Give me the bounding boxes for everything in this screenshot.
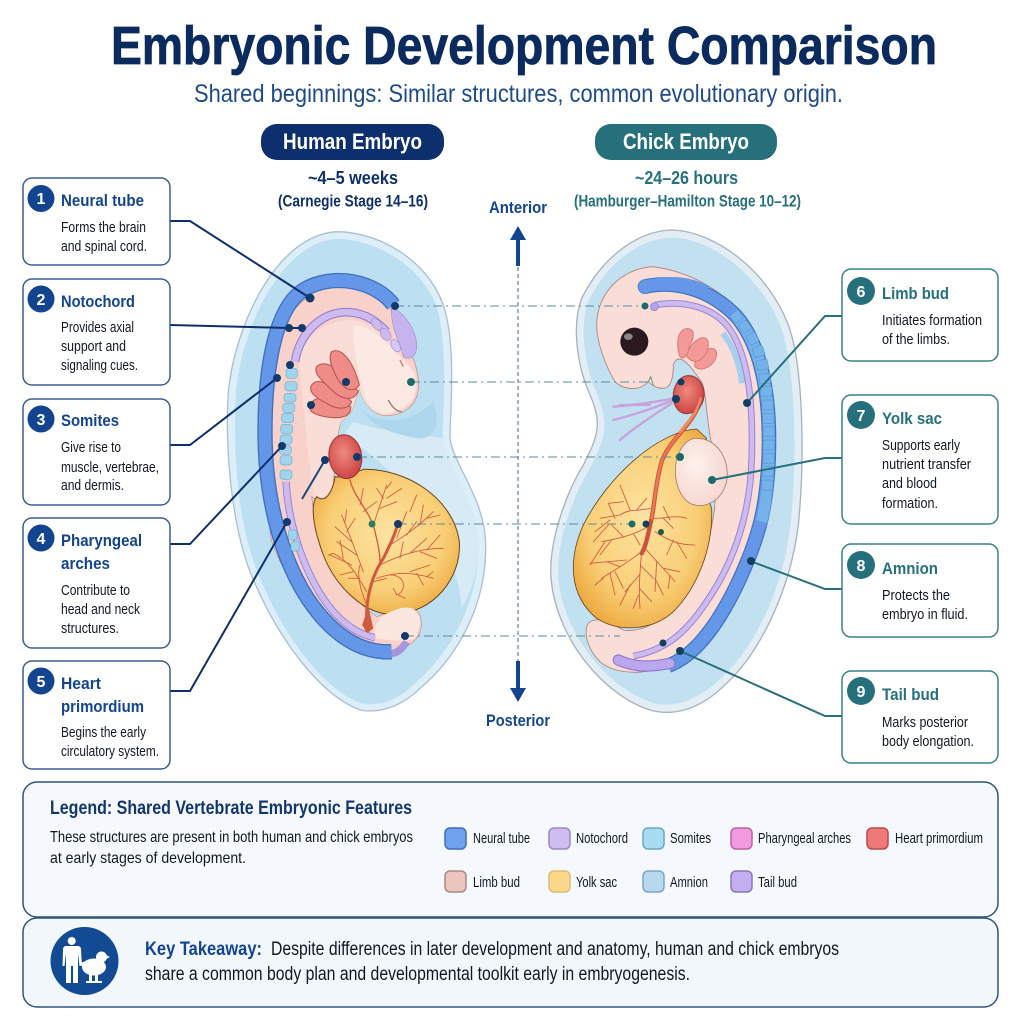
comparison dashed guide lines: [358, 306, 680, 636]
callout 6: limb bud: [842, 269, 998, 361]
callout 9: tail bud: [842, 671, 998, 763]
callout 9: tail bud: Marks posterior: [882, 715, 968, 731]
callout 4: pharyngeal arches: head and neck: [61, 602, 141, 618]
legend labels: Somites: [670, 831, 711, 847]
legend labels: Limb bud: [473, 875, 520, 891]
callout 7: yolk sac: 7: [857, 408, 866, 425]
callout 7: yolk sac: Supports early: [882, 438, 961, 454]
callout 7: yolk sac: and blood: [882, 476, 937, 492]
callout 9: tail bud: body elongation.: [882, 734, 974, 750]
legend labels: Yolk sac: [576, 875, 617, 891]
callout 4: pharyngeal arches: Contribute to: [61, 583, 130, 599]
takeaway text: [145, 939, 839, 985]
takeaway text: Key Takeaway:: [145, 939, 262, 960]
callout 4: pharyngeal arches: [23, 518, 170, 648]
callout 4: pharyngeal arches: 4: [37, 531, 46, 548]
callout 4: pharyngeal arches: Pharyngeal: [61, 531, 142, 550]
callout 3: somites: [23, 399, 170, 505]
callout 1: neural tube: Neural tube: [61, 191, 144, 210]
callout 9: tail bud: 9: [857, 684, 866, 701]
anterior-posterior axis: Posterior: [486, 711, 550, 730]
chick heart outflow: [680, 398, 701, 432]
callout 7: yolk sac: [842, 395, 998, 524]
chick embryo heading: [595, 124, 777, 160]
callout 6: limb bud: Initiates formation: [882, 313, 982, 329]
chick marker dots: [628, 302, 755, 655]
callout 1: neural tube: Forms the brain: [61, 220, 146, 236]
callout 2: notochord: Provides axial: [61, 320, 134, 336]
human embryo illustration: [227, 232, 486, 711]
human yolk sac: [313, 469, 459, 614]
human purple head blob: [392, 308, 417, 358]
chick eye: [620, 328, 648, 356]
anterior-posterior axis: [486, 198, 550, 730]
human tail cover: [375, 608, 420, 641]
chick limb swelling: [675, 438, 727, 506]
chick tail bud end: [618, 660, 670, 666]
takeaway text: share a common body plan and developmental toolkit early in embryogenesis.: [145, 964, 690, 985]
subtitle: Shared beginnings: Similar structures, common evolutionary origin.: [194, 80, 843, 108]
chick stage: [574, 168, 801, 210]
callout 6: limb bud: of the limbs.: [882, 332, 950, 348]
callout 5: heart primordium: [23, 661, 170, 769]
callout 3: somites: and dermis.: [61, 478, 124, 494]
callout 1: neural tube: 1: [37, 191, 46, 208]
callout 2: notochord: signaling cues.: [61, 358, 138, 374]
human neural tube: [265, 281, 393, 652]
chick body: [586, 267, 764, 672]
callout 6: limb bud: 6: [857, 284, 866, 301]
chick yolk sac: [573, 429, 712, 628]
chick leader lines: [680, 316, 842, 716]
chick allantois: [613, 398, 675, 440]
callout 8: amnion: Amnion: [882, 559, 938, 578]
callout 9: tail bud: Tail bud: [882, 685, 939, 704]
callout 8: amnion: 8: [857, 558, 866, 575]
callout 2: notochord: Notochord: [61, 292, 135, 311]
callout 7: yolk sac: formation.: [882, 496, 938, 512]
chick stage: (Hamburger–Hamilton Stage 10–12): [574, 192, 801, 210]
callout 5: heart primordium: primordium: [61, 697, 144, 716]
callout 3: somites: muscle, vertebrae,: [61, 460, 159, 476]
legend labels: Tail bud: [758, 875, 797, 891]
callout 3: somites: 3: [37, 412, 46, 429]
human somites: [279, 368, 300, 551]
legend labels: Heart primordium: [895, 831, 983, 847]
callout 7: yolk sac: Yolk sac: [882, 409, 942, 428]
chick notochord: [633, 303, 752, 656]
key takeaway panel: [23, 918, 998, 1007]
chick mouth: [648, 377, 653, 385]
callout 5: heart primordium: 5: [37, 674, 46, 691]
icon: human and chick: [50, 927, 118, 995]
legend description: These structures are present in both human and chick embryos: [50, 829, 413, 846]
human vessels: [328, 480, 443, 632]
human embryo heading: [261, 124, 444, 160]
legend labels: [473, 831, 983, 891]
legend labels: Pharyngeal arches: [758, 831, 851, 847]
legend description: [50, 829, 413, 867]
chick vessels: [590, 402, 700, 608]
callout 2: notochord: [23, 279, 170, 385]
callout 3: somites: Give rise to: [61, 440, 121, 456]
callout 1: neural tube: [23, 178, 170, 265]
chick amnion: [551, 230, 802, 712]
callout 5: heart primordium: Begins the early: [61, 725, 147, 741]
legend labels: Neural tube: [473, 831, 530, 847]
human notochord: [295, 312, 387, 362]
human leader lines: [170, 221, 325, 691]
legend panel: [23, 782, 998, 917]
human heart: [326, 433, 365, 481]
legend title: Legend: Shared Vertebrate Embryonic Features: [50, 798, 412, 819]
human tail bud tip: [392, 642, 407, 653]
human amnion: [227, 232, 486, 711]
callout 2: notochord: support and: [61, 339, 126, 355]
chick embryo illustration: [551, 230, 802, 712]
chick embryo heading: Chick Embryo: [623, 129, 749, 154]
callout 8: amnion: embryo in fluid.: [882, 607, 968, 623]
chick neural tube: [645, 284, 769, 666]
human stage: ~4–5 weeks: [308, 168, 398, 188]
legend labels: Amnion: [670, 875, 708, 891]
callout 7: yolk sac: nutrient transfer: [882, 457, 971, 473]
callout 4: pharyngeal arches: arches: [61, 554, 110, 573]
callout 5: heart primordium: Heart: [61, 674, 101, 693]
callout 6: limb bud: Limb bud: [882, 284, 949, 303]
chick stage: ~24–26 hours: [635, 168, 738, 188]
legend swatches: [445, 828, 888, 892]
human marker dots: [273, 294, 415, 640]
chick somites: [737, 317, 769, 522]
human body: [265, 282, 421, 653]
takeaway text: Despite differences in later development and anatomy, human and chick embryos: [271, 939, 839, 960]
callout 5: heart primordium: circulatory system.: [61, 744, 159, 760]
human face details: [388, 400, 402, 412]
human embryo heading: Human Embryo: [283, 129, 422, 154]
legend description: at early stages of development.: [50, 850, 246, 867]
callout 8: amnion: [842, 544, 998, 637]
callout 3: somites: Somites: [61, 411, 119, 430]
legend labels: Notochord: [576, 831, 628, 847]
anterior-posterior axis: Anterior: [489, 198, 547, 217]
human stage: (Carnegie Stage 14–16): [278, 192, 428, 210]
callout 8: amnion: Protects the: [882, 588, 950, 604]
chick pharyngeal arches: [678, 329, 717, 369]
chick heart: [673, 376, 704, 414]
callout 4: pharyngeal arches: structures.: [61, 621, 119, 637]
human pharyngeal arches: [310, 351, 359, 418]
human stage: [278, 168, 428, 210]
callout 1: neural tube: and spinal cord.: [61, 239, 147, 255]
callout 2: notochord: 2: [37, 292, 46, 309]
